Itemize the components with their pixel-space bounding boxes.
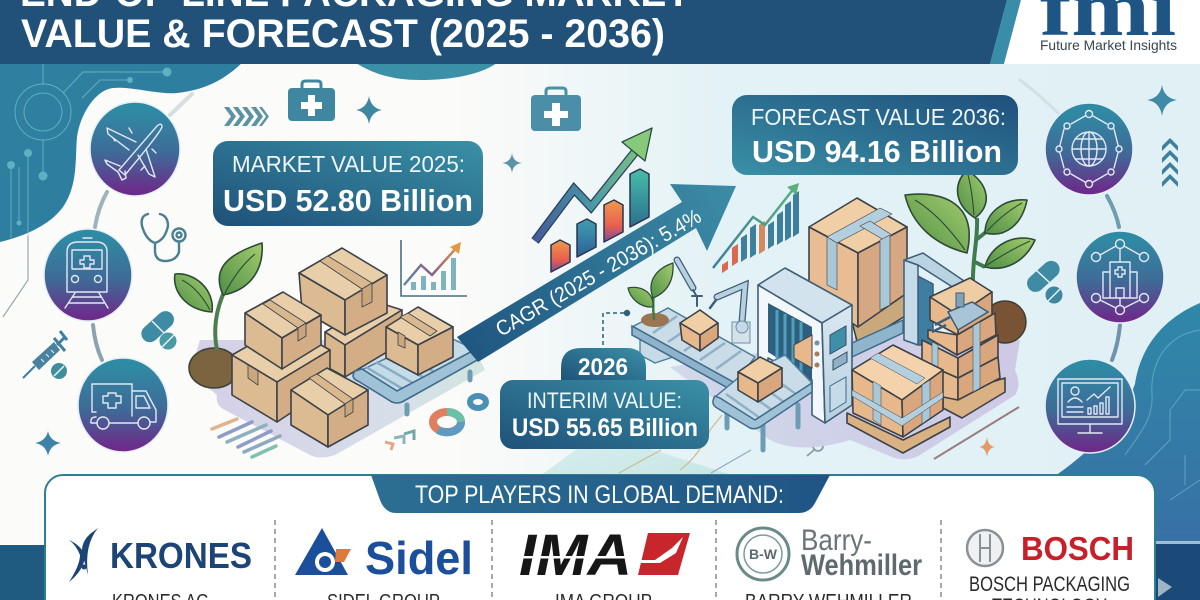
title: VALUE & FORECAST (2025 - 2036) (21, 12, 665, 56)
callout: market value 2025 (213, 141, 483, 226)
2026 tab (561, 348, 646, 382)
icon: capsule left (138, 308, 177, 350)
gantry frame (904, 253, 970, 345)
small plant on conveyor (628, 263, 673, 327)
icon: sparkle 3 (1147, 85, 1177, 116)
icon: sparkle 1 (356, 96, 382, 124)
robot arm 2 (710, 285, 750, 343)
icon: analytics monitor circle (1045, 359, 1135, 453)
icon: hospital network circle (1076, 231, 1164, 323)
CAGR label: CAGR (2025 - 2036): 5.4% (492, 205, 705, 341)
decor: colour stripes (212, 419, 280, 457)
player: Bosch (967, 530, 1134, 600)
ground shadow left (190, 340, 485, 458)
packaging machine (758, 268, 852, 423)
decorative pale green wedge (540, 432, 735, 476)
decor: magnifier (807, 441, 823, 456)
header banner (0, 0, 1021, 64)
icon: medical briefcase 2 (531, 88, 581, 131)
panel: top players (45, 475, 1155, 600)
icon: sparkle 4 (35, 431, 61, 456)
player: Bosch: BOSCH PACKAGING (969, 573, 1130, 596)
decor: thin lines near interim (619, 407, 1019, 473)
left isometric scene (175, 243, 485, 458)
callout: market value 2025: USD 52.80 Billion (223, 183, 473, 218)
player: Barry-Wehmiller (737, 524, 922, 600)
callout: interim value 2026: INTERIM VALUE: (527, 388, 682, 413)
box: lower left (232, 325, 330, 422)
left conveyor (632, 308, 755, 392)
box on front conveyor (738, 357, 782, 402)
icon: sparkle 2 (502, 153, 522, 173)
panel heading: TOP PLAYERS IN GLOBAL DEMAND: (415, 481, 784, 509)
player: Krones: KRONES (110, 535, 252, 576)
decor: small chevrons (385, 431, 414, 450)
front conveyor (713, 355, 812, 450)
box: back middle (325, 302, 402, 377)
box: on conveyor (386, 307, 453, 375)
dashed pointer to 2026 (603, 310, 630, 345)
back conveyor (852, 320, 903, 357)
decorative top-left teal blob with circuit lines (0, 60, 245, 317)
icon: stethoscope (142, 214, 186, 261)
right isometric factory scene (628, 170, 1035, 459)
gantry head (932, 293, 988, 332)
icon: chevrons up (1162, 138, 1178, 187)
plant right (905, 170, 1035, 285)
conveyor left (353, 333, 482, 414)
callout: forecast value 2036: USD 94.16 Billion (752, 134, 1002, 169)
player: Bosch: BOSCH (1021, 530, 1134, 567)
ground shadow right (670, 330, 1020, 459)
small chart right (713, 183, 799, 273)
icon: globe network circle (1045, 103, 1133, 195)
icon: capsule right (1024, 257, 1063, 304)
box: top back (299, 248, 387, 335)
rising bar chart with green arrow (535, 128, 652, 272)
small chart left (401, 240, 467, 296)
callout: forecast value 2036 (732, 95, 1018, 175)
icon: medical briefcase 1 (288, 81, 335, 121)
player: Barry-Wehmiller: Wehmiller (801, 549, 922, 582)
player: Krones (69, 528, 252, 600)
connector arcs between icons (93, 80, 1120, 360)
player: Sidel: Sidel (365, 532, 473, 584)
panel heading (371, 475, 830, 513)
player: Barry-Wehmiller: B-W (749, 546, 778, 562)
2026 tab: 2026 (578, 354, 628, 381)
robot arm 1 (677, 260, 702, 306)
box: upper left (245, 292, 321, 369)
box small on conveyor (680, 310, 718, 351)
pot right (984, 301, 1026, 343)
player: IMA: IMA (519, 523, 632, 588)
icon: ambulance circle (78, 358, 168, 452)
decor: gear (470, 396, 486, 408)
decor: donut (433, 412, 461, 432)
icon: chevrons right (224, 107, 269, 126)
decorative bottom-left navy band (0, 545, 50, 600)
large wrapped box (809, 198, 915, 345)
player: IMA (515, 523, 690, 600)
front pallet boxes (847, 345, 950, 453)
icon: orange sparkle (979, 437, 995, 457)
logo: Future Market Insights: Future Market Insights (1040, 37, 1177, 53)
box: front (291, 368, 368, 447)
decorative bottom-right blue blob (1040, 303, 1200, 600)
growth arrow with CAGR (457, 184, 736, 362)
icon: syringe (23, 331, 67, 379)
callout: interim value 2026 (500, 348, 709, 449)
icon: train circle (44, 229, 132, 321)
decorative bottom-right navy band (1100, 541, 1200, 600)
player: Barry-Wehmiller: Barry- (801, 524, 872, 557)
player: Sidel (295, 528, 473, 600)
right stacked pallet (922, 278, 1005, 418)
callout: market value 2025: MARKET VALUE 2025: (232, 151, 465, 177)
callout: interim value 2026: USD 55.65 Billion (512, 414, 698, 442)
logo: Future Market Insights (1004, 0, 1200, 64)
callout: forecast value 2036: FORECAST VALUE 2036: (751, 104, 1006, 130)
icon: airplane circle (90, 102, 180, 196)
plant left (175, 243, 262, 388)
decorative top-centre teal blob (356, 63, 497, 80)
